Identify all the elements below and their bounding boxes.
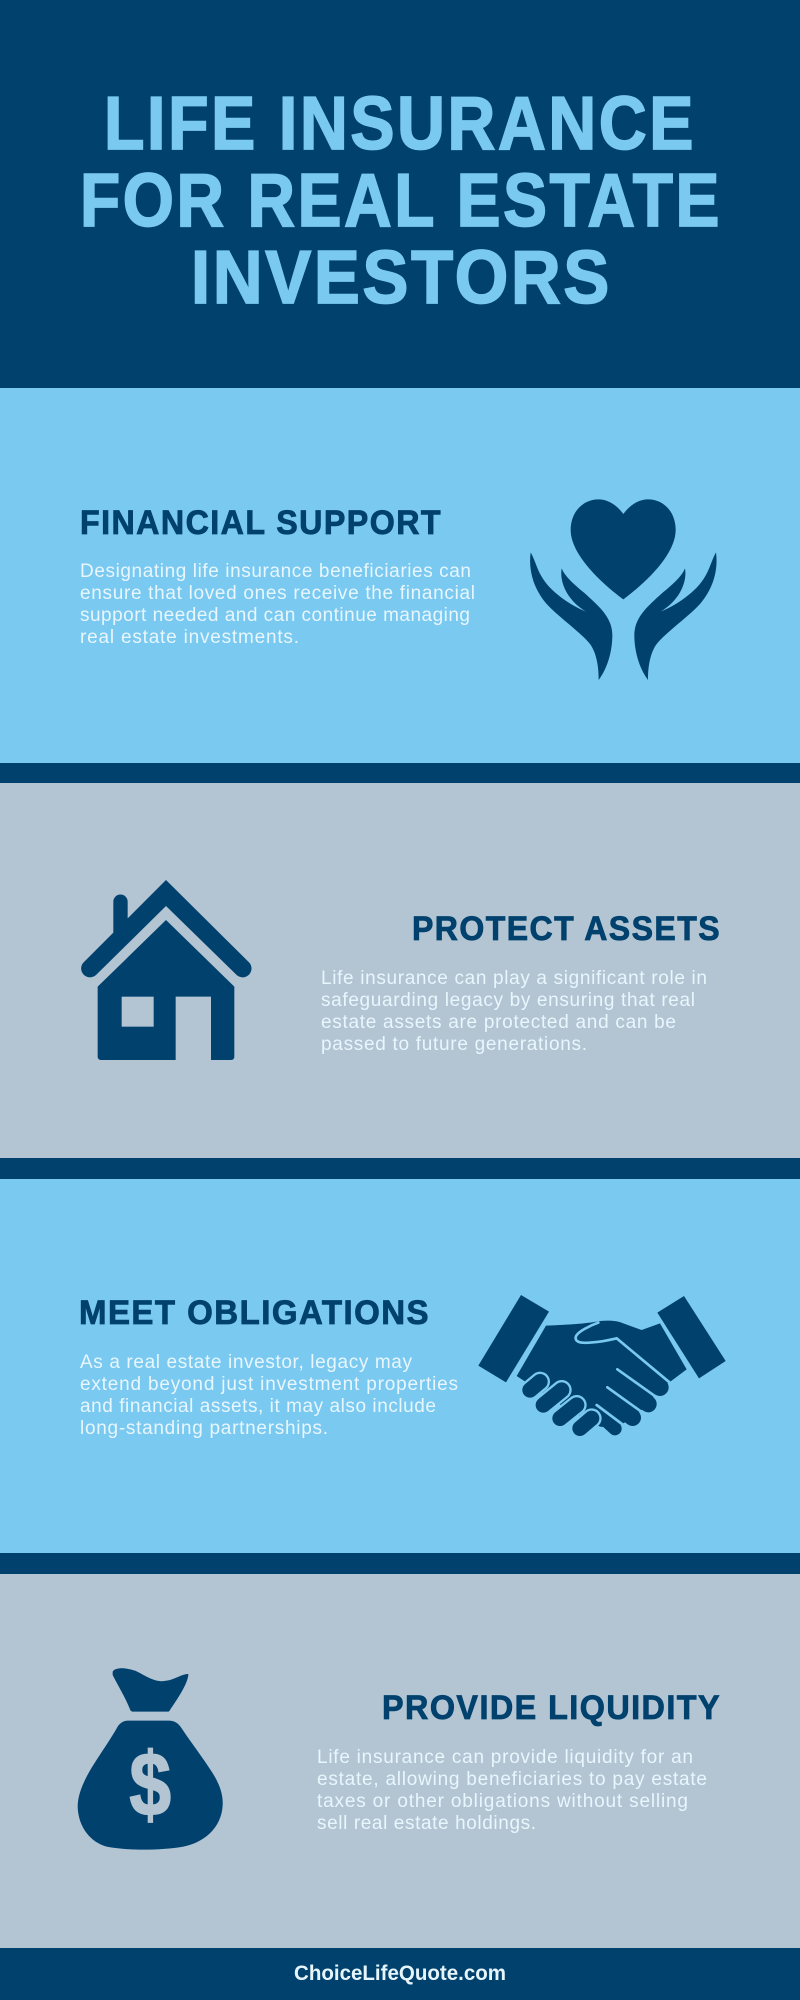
footer bar bbox=[0, 1948, 800, 2000]
icon: hands holding heart bbox=[530, 499, 717, 680]
text block: protect assets bbox=[321, 968, 707, 1055]
text block: protect assets: passed to future generations. bbox=[321, 1034, 587, 1055]
text block: protect assets: estate assets are protected and can be bbox=[321, 1012, 676, 1033]
heading: meet obligations: MEET OBLIGATIONS bbox=[79, 1294, 430, 1332]
text block: meet obligations: As a real estate investor, legacy may bbox=[80, 1352, 412, 1373]
title: LIFE INSURANCE bbox=[104, 81, 696, 165]
heading: provide liquidity: PROVIDE LIQUIDITY bbox=[382, 1689, 721, 1727]
heading: financial support: FINANCIAL SUPPORT bbox=[80, 504, 442, 542]
text block: meet obligations: long-standing partnerships. bbox=[80, 1418, 328, 1439]
text block: financial support bbox=[80, 561, 475, 648]
text block: financial support: support needed and can continue managing bbox=[80, 605, 470, 626]
icon: money bag bbox=[78, 1668, 223, 1850]
title: INVESTORS bbox=[191, 235, 612, 319]
title: FOR REAL ESTATE bbox=[80, 158, 722, 242]
text block: provide liquidity: sell real estate holdings. bbox=[317, 1813, 536, 1834]
text block: provide liquidity: taxes or other obligations without selling bbox=[317, 1791, 688, 1812]
text block: meet obligations: and financial assets, it may also include bbox=[80, 1396, 436, 1417]
text block: financial support: Designating life insurance beneficiaries can bbox=[80, 561, 471, 582]
title bbox=[80, 81, 722, 319]
text block: provide liquidity bbox=[317, 1747, 707, 1834]
icon: handshake bbox=[478, 1295, 726, 1429]
panel: meet obligations bbox=[0, 1179, 800, 1553]
panel: protect assets bbox=[0, 783, 800, 1158]
text block: protect assets: Life insurance can play a significant role in bbox=[321, 968, 707, 989]
panel: provide liquidity bbox=[0, 1574, 800, 1948]
text block: provide liquidity: Life insurance can provide liquidity for an bbox=[317, 1747, 693, 1768]
text block: financial support: real estate investments. bbox=[80, 627, 299, 648]
heading: protect assets: PROTECT ASSETS bbox=[412, 910, 721, 948]
icon: house bbox=[81, 880, 252, 1060]
text block: meet obligations bbox=[80, 1352, 458, 1439]
text block: protect assets: safeguarding legacy by ensuring that real bbox=[321, 990, 695, 1011]
text block: financial support: ensure that loved ones receive the financial bbox=[80, 583, 475, 604]
text block: provide liquidity: estate, allowing beneficiaries to pay estate bbox=[317, 1769, 707, 1790]
text block: meet obligations: extend beyond just investment properties bbox=[80, 1374, 458, 1395]
header panel bbox=[0, 0, 800, 388]
panel: financial support bbox=[0, 388, 800, 763]
icon: money bag: $ bbox=[129, 1735, 171, 1835]
footer website text: ChoiceLifeQuote.com bbox=[294, 1962, 506, 1985]
